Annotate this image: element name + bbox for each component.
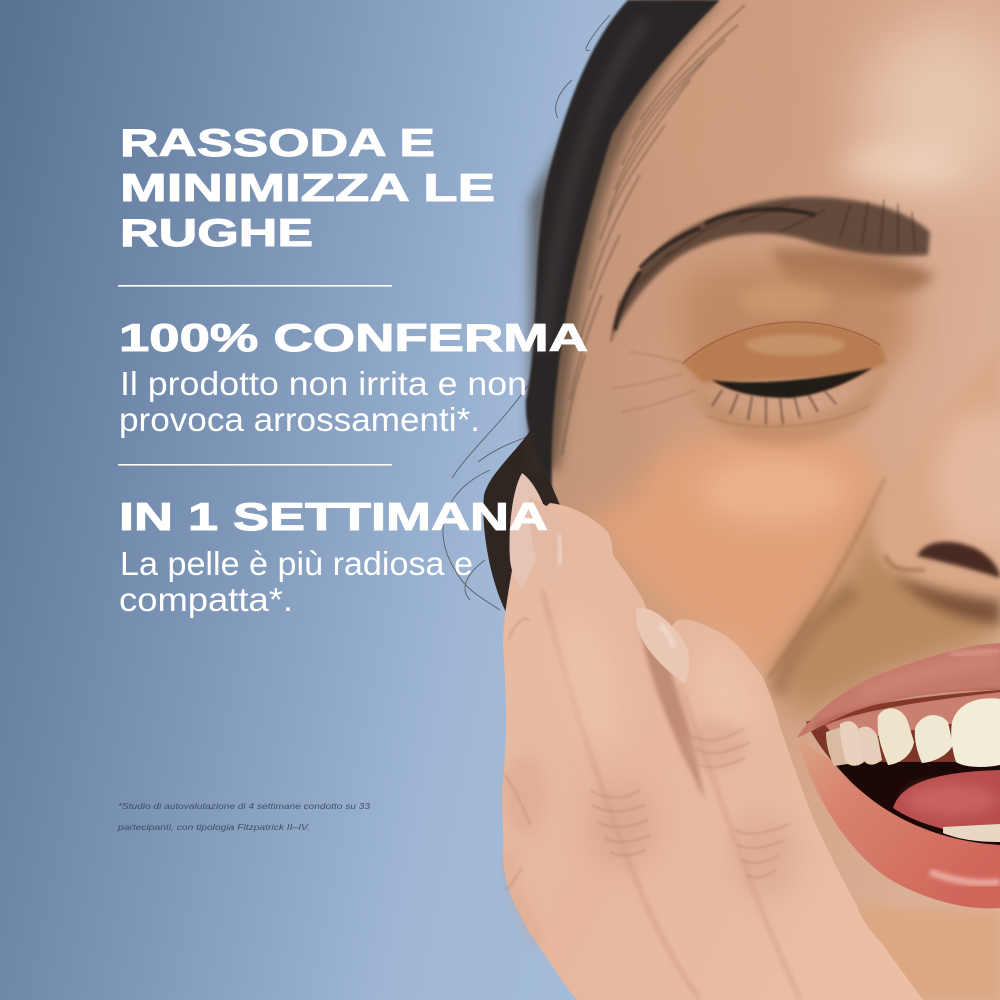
block: in 1 settimana: La pelle è più radiosa e	[120, 545, 473, 582]
face skin	[545, 0, 1000, 1000]
hand with fingers and nails	[502, 473, 923, 1000]
heading: RUGHE	[120, 212, 313, 255]
dark throat	[833, 762, 1000, 845]
tongue	[893, 770, 1000, 838]
divider middle	[118, 464, 392, 466]
block: 100% conferma: 100% CONFERMA	[119, 317, 588, 360]
upper teeth	[826, 698, 1000, 767]
heading: MINIMIZZA LE	[120, 167, 495, 210]
hair behind the face	[483, 400, 600, 620]
mouth	[797, 643, 1000, 908]
hand shape	[502, 503, 923, 1000]
nail: back finger	[510, 473, 550, 590]
flyaway hairs	[443, 15, 610, 610]
hair mass	[526, 0, 720, 490]
block: 100% conferma: Il prodotto non irrita e non	[120, 365, 527, 402]
nail: index finger	[530, 497, 568, 590]
photo: woman's face and hand	[443, 0, 1000, 1000]
block: 100% conferma	[119, 317, 588, 438]
footnote: *Studio di autovalutazione di 4 settimane condotto su 33	[118, 801, 370, 811]
eyelid	[683, 322, 887, 382]
heading	[120, 122, 495, 255]
nail: front finger	[636, 608, 689, 684]
finger shading	[542, 590, 700, 1000]
lashes	[712, 368, 872, 398]
lower lip	[797, 738, 1000, 908]
eyebrow	[611, 197, 935, 342]
mouth interior	[806, 690, 1000, 845]
feathered hairline	[562, 5, 745, 455]
divider top	[118, 285, 392, 287]
gums	[825, 692, 1000, 742]
footnote	[117, 801, 370, 832]
footnote: partecipanti, con tipologia Fitzpatrick II–IV.	[117, 822, 310, 832]
wrinkles	[612, 352, 870, 427]
knuckle shading	[586, 780, 658, 870]
block: in 1 settimana: compatta*.	[119, 581, 293, 618]
closed eye and crow's feet	[612, 260, 913, 445]
lower teeth	[943, 824, 1000, 842]
eye socket	[679, 260, 913, 385]
heading: RASSODA E	[120, 122, 435, 165]
hair on the head	[443, 0, 745, 610]
block: in 1 settimana: IN 1 SETTIMANA	[119, 496, 548, 539]
block: in 1 settimana	[119, 496, 548, 618]
knuckle creases	[505, 619, 790, 890]
under-eye skin	[690, 370, 885, 445]
block: 100% conferma: provoca arrossamenti*.	[119, 401, 480, 438]
lip highlights	[930, 872, 1000, 883]
soft hairline shadow	[530, 0, 720, 470]
nose	[874, 340, 1000, 625]
upper lip	[797, 643, 1000, 738]
